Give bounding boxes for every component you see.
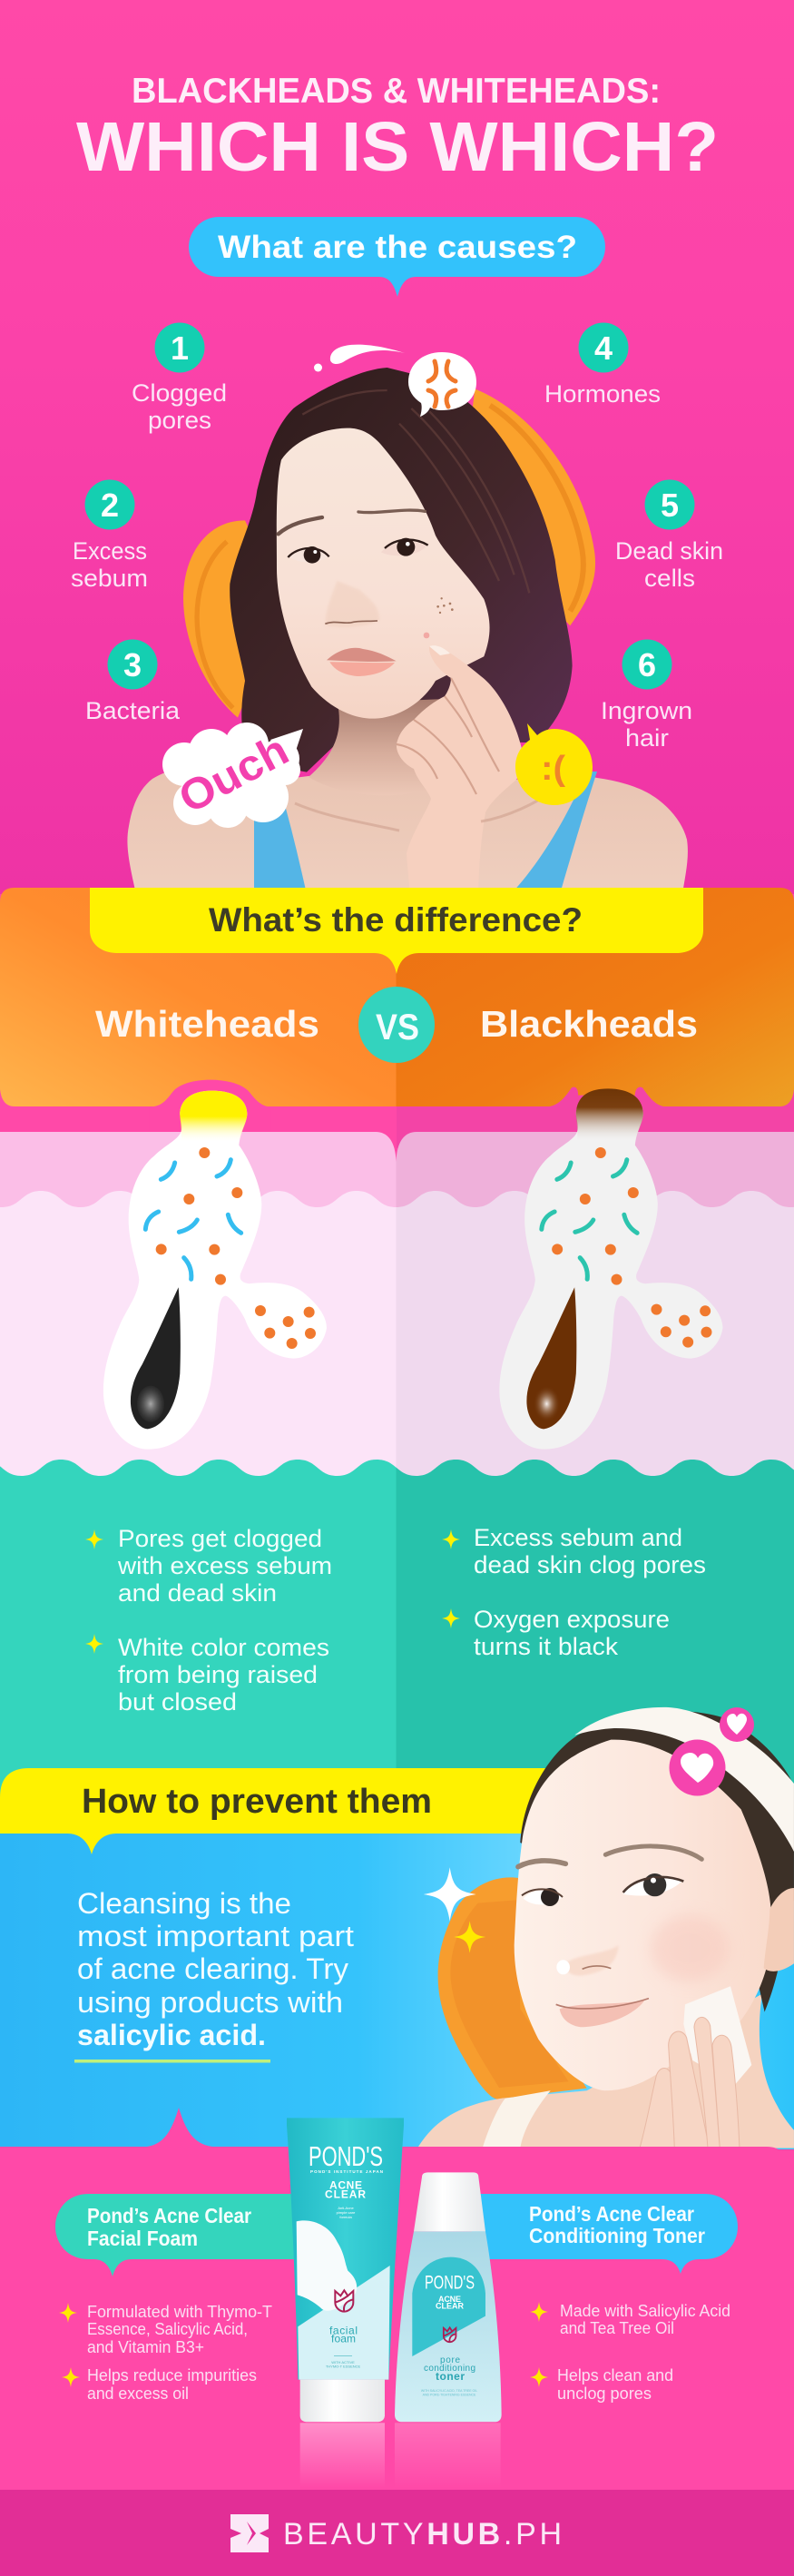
- callout: sad face: [515, 723, 593, 805]
- footer band: [0, 2490, 794, 2576]
- logo mark: [230, 2514, 269, 2552]
- product: facial foam tube: POND'S: [309, 2140, 383, 2172]
- icon: star bullet: [62, 2367, 80, 2387]
- cause 5: dead skin cells: 5: [661, 487, 679, 524]
- callout: sad face: :(: [541, 750, 565, 788]
- cause 1: clogged pores: 1: [171, 329, 189, 367]
- tube cap: [300, 2380, 385, 2422]
- white cap: [414, 2172, 485, 2231]
- cause 6: ingrown hair: 6: [638, 646, 656, 683]
- blemish: [436, 597, 454, 614]
- title: [76, 72, 719, 186]
- cause 3: bacteria: Bacteria: [85, 697, 181, 724]
- product: conditioning toner bottle: pore: [440, 2355, 460, 2365]
- cotton pad: [683, 1986, 751, 2085]
- bacteria dashes: [542, 1160, 637, 1279]
- heading: how to prevent them: [0, 1768, 581, 1854]
- sebum dots: [156, 1147, 316, 1349]
- text block: whitehead facts: but closed: [118, 1688, 237, 1716]
- skin bump: [545, 1087, 667, 1132]
- cause 6: ingrown hair: hair: [625, 724, 669, 752]
- product: conditioning toner bottle: conditioning: [424, 2364, 475, 2374]
- cause 5: dead skin cells: Dead skin: [615, 537, 723, 565]
- product: facial foam tube: CLEAR: [325, 2188, 366, 2201]
- text block: toner benefits: unclog pores: [557, 2384, 652, 2403]
- text block: toner benefits: and Tea Tree Oil: [560, 2319, 674, 2337]
- product: conditioning toner bottle: WITH SALICYLIC ACID, TEA TREE OIL: [421, 2389, 477, 2393]
- diagram: whitehead pore: [103, 1080, 327, 1450]
- text block: whitehead facts: and dead skin: [118, 1579, 277, 1607]
- text block: blackhead facts: [442, 1524, 706, 1660]
- product: facial foam tube: POND'S INSTITUTE JAPAN: [310, 2169, 383, 2174]
- cause 2: excess sebum: [71, 479, 148, 592]
- product: facial foam tube: [287, 2118, 404, 2488]
- icon: star bullet: [85, 1634, 103, 1654]
- cause 6: ingrown hair: Ingrown: [601, 697, 692, 724]
- text block: toner benefits: Made with Salicylic Acid: [560, 2302, 730, 2320]
- text block: facial foam benefits: and Vitamin B3+: [87, 2338, 204, 2356]
- product: facial foam tube: formula: [339, 2215, 352, 2219]
- text block: facial foam benefits: and excess oil: [87, 2384, 189, 2403]
- cause 3: bacteria: [85, 639, 181, 724]
- text block: cleansing advice: of acne clearing. Try: [77, 1952, 348, 1985]
- sebum dots: [552, 1147, 711, 1348]
- text block: cleansing advice: Cleansing is the: [77, 1887, 291, 1920]
- reflection: [395, 2423, 501, 2488]
- dash accent: white swoosh: [314, 345, 405, 372]
- title: BLACKHEADS & WHITEHEADS:: [132, 72, 661, 111]
- cause 1: clogged pores: pores: [148, 407, 211, 434]
- product: conditioning toner bottle: [395, 2172, 502, 2488]
- pill: conditioning toner: Conditioning Toner: [529, 2224, 705, 2247]
- cause 2: excess sebum: sebum: [71, 565, 148, 592]
- text block: blackhead facts: Oxygen exposure: [474, 1606, 670, 1633]
- text block: facial foam benefits: [59, 2303, 272, 2403]
- icon: white sparkle: [424, 1867, 476, 1922]
- collarbones: [295, 790, 555, 831]
- text block: facial foam benefits: Helps reduce impurities: [87, 2366, 257, 2384]
- text block: cleansing advice: using products with: [77, 1986, 343, 2019]
- photo: woman cleansing face: [417, 1707, 794, 2148]
- pale lower panel: [298, 2266, 390, 2380]
- text block: blackhead facts: dead skin clog pores: [474, 1551, 706, 1578]
- product: facial foam tube: facial: [329, 2325, 358, 2337]
- product: facial foam tube: WITH ACTIVE: [331, 2360, 355, 2365]
- logo: beautyhub: BEAUTYHUB.PH: [283, 2517, 564, 2551]
- product: facial foam tube: Anti-Acne: [338, 2206, 354, 2210]
- pore shape: [103, 1091, 327, 1450]
- heading: what's the difference: What’s the difference?: [209, 901, 583, 939]
- orange right half: [396, 888, 794, 1106]
- icon: heart badge large: [670, 1739, 726, 1795]
- product: facial foam tube: THYMO-T ESSENCE: [326, 2364, 361, 2369]
- pill: conditioning toner: [472, 2194, 738, 2274]
- text block: toner benefits: Helps clean and: [557, 2366, 673, 2384]
- shoulders and chest: [127, 766, 688, 894]
- hair glare: [533, 1386, 560, 1422]
- reflection: [300, 2423, 385, 2488]
- tulip logo: [444, 2327, 456, 2342]
- hair: [230, 368, 573, 772]
- bacteria dashes: [145, 1160, 241, 1279]
- photo: woman touching pimple: [127, 368, 688, 894]
- text block: whitehead facts: from being raised: [118, 1661, 318, 1688]
- nose: [325, 581, 379, 627]
- icon: star bullet: [530, 2302, 548, 2322]
- teal label: [412, 2257, 485, 2356]
- underline: [74, 2060, 270, 2062]
- text block: whitehead facts: Pores get clogged: [118, 1525, 322, 1552]
- text block: facial foam benefits: Essence, Salicylic Acid,: [87, 2320, 248, 2338]
- pill: facial foam: Facial Foam: [87, 2227, 198, 2250]
- headband: [574, 1707, 794, 1852]
- title: WHICH IS WHICH?: [76, 108, 719, 186]
- hair: [526, 1287, 576, 1429]
- hand: [397, 645, 523, 894]
- panel: whiteheads vs blackheads header: [0, 888, 794, 1106]
- text block: whitehead facts: with excess sebum: [117, 1552, 332, 1579]
- pink strip: [0, 1085, 794, 1148]
- neck: [309, 699, 445, 795]
- icon: star bullet: [59, 2303, 77, 2323]
- cause 1: clogged pores: Clogged: [132, 379, 227, 407]
- skin bump: [150, 1080, 270, 1132]
- product: facial foam tube: foam: [331, 2333, 356, 2345]
- icon: yellow sparkle: [454, 1921, 485, 1953]
- lips: [327, 648, 397, 676]
- section background: causes: [0, 0, 794, 894]
- nose: [556, 1945, 619, 1976]
- pill: facial foam: [55, 2194, 309, 2276]
- product: facial foam tube: ACNE: [329, 2178, 362, 2191]
- text block: facial foam benefits: Formulated with Thymo-T: [87, 2303, 272, 2321]
- cause 4: hormones: [544, 323, 661, 408]
- pore shape: [499, 1091, 722, 1450]
- face: [515, 1740, 771, 2090]
- orange blob behind the face: [438, 1877, 587, 2099]
- icon: anger bubble: [408, 352, 476, 417]
- foam: [297, 2220, 357, 2311]
- icon: star bullet: [530, 2367, 548, 2387]
- speech pill: what are the causes: [189, 217, 605, 297]
- product: conditioning toner bottle: ACNE: [438, 2295, 461, 2304]
- cause 6: ingrown hair: [601, 639, 692, 752]
- lips: [556, 1999, 649, 2027]
- cause 5: dead skin cells: cells: [644, 565, 695, 592]
- whitehead yellow top: [180, 1091, 247, 1142]
- hair: [131, 1287, 181, 1429]
- orange left half: [0, 888, 396, 1106]
- label: whiteheads: Whiteheads: [95, 1003, 319, 1045]
- cheek blush: [651, 1915, 729, 1981]
- cause 2: excess sebum: Excess: [73, 537, 147, 565]
- strap: [483, 2090, 551, 2148]
- icon: star bullet: [85, 1529, 103, 1549]
- text block: whitehead facts: White color comes: [118, 1634, 329, 1661]
- cause 4: hormones: 4: [594, 329, 613, 367]
- cause 4: hormones: Hormones: [544, 380, 661, 408]
- icon: star bullet: [442, 1529, 460, 1549]
- text block: whitehead facts: [85, 1525, 332, 1716]
- vs badge: VS: [376, 1008, 419, 1047]
- cause 2: excess sebum: 2: [101, 487, 119, 524]
- shoulder and neck: [417, 1994, 794, 2148]
- eyebrows: [518, 1846, 701, 1867]
- bottle body: [395, 2231, 502, 2422]
- text block: blackhead facts: Excess sebum and: [474, 1524, 682, 1551]
- callout: ouch: Ouch: [172, 726, 297, 823]
- eyes: [522, 1873, 683, 1906]
- tulip logo: [335, 2290, 353, 2312]
- fingers: [640, 2017, 740, 2148]
- product: conditioning toner bottle: CLEAR: [436, 2302, 465, 2311]
- hair: [520, 1711, 794, 2012]
- text block: cleansing advice: [74, 1887, 354, 2062]
- vs badge: [358, 987, 435, 1063]
- text block: blackhead facts: turns it black: [474, 1633, 619, 1660]
- tank top straps: [254, 772, 597, 894]
- text block: cleansing advice: salicylic acid.: [77, 2019, 266, 2051]
- skin panels: [0, 1132, 794, 1489]
- teal panel waves: [0, 1460, 794, 1797]
- text block: cleansing advice: most important part: [77, 1920, 354, 1952]
- panel: products background: [0, 2108, 794, 2492]
- orange blob behind the head: [183, 388, 595, 718]
- eyes: [288, 538, 428, 564]
- tube body: [287, 2118, 404, 2380]
- panel: prevention background: [0, 1832, 794, 2149]
- eyebrows: [279, 510, 425, 534]
- product: conditioning toner bottle: POND'S: [425, 2273, 475, 2294]
- speech pill: what are the causes: What are the causes?: [218, 230, 577, 265]
- cause 3: bacteria: 3: [123, 646, 142, 683]
- cause 5: dead skin cells: [615, 479, 723, 592]
- pill: facial foam: Pond’s Acne Clear: [87, 2204, 251, 2227]
- ear: [764, 1888, 794, 1971]
- face: [277, 428, 490, 719]
- diagram: blackhead pore: [499, 1087, 722, 1450]
- pill: conditioning toner: Pond’s Acne Clear: [529, 2202, 694, 2226]
- product: conditioning toner bottle: toner: [436, 2370, 465, 2383]
- product: conditioning toner bottle: AND PORE-TIGHTENING ESSENCE: [423, 2393, 476, 2396]
- hair glare: [137, 1386, 164, 1422]
- text block: toner benefits: [530, 2302, 730, 2403]
- label: blackheads: Blackheads: [480, 1003, 698, 1045]
- heading: how to prevent them: How to prevent them: [82, 1783, 432, 1821]
- cause 1: clogged pores: [132, 323, 227, 434]
- icon: heart badge small: [720, 1707, 754, 1742]
- icon: star bullet: [442, 1608, 460, 1628]
- blackhead brown top: [576, 1088, 643, 1142]
- product: facial foam tube: pimple care: [337, 2210, 356, 2215]
- heading: what's the difference: [90, 888, 703, 974]
